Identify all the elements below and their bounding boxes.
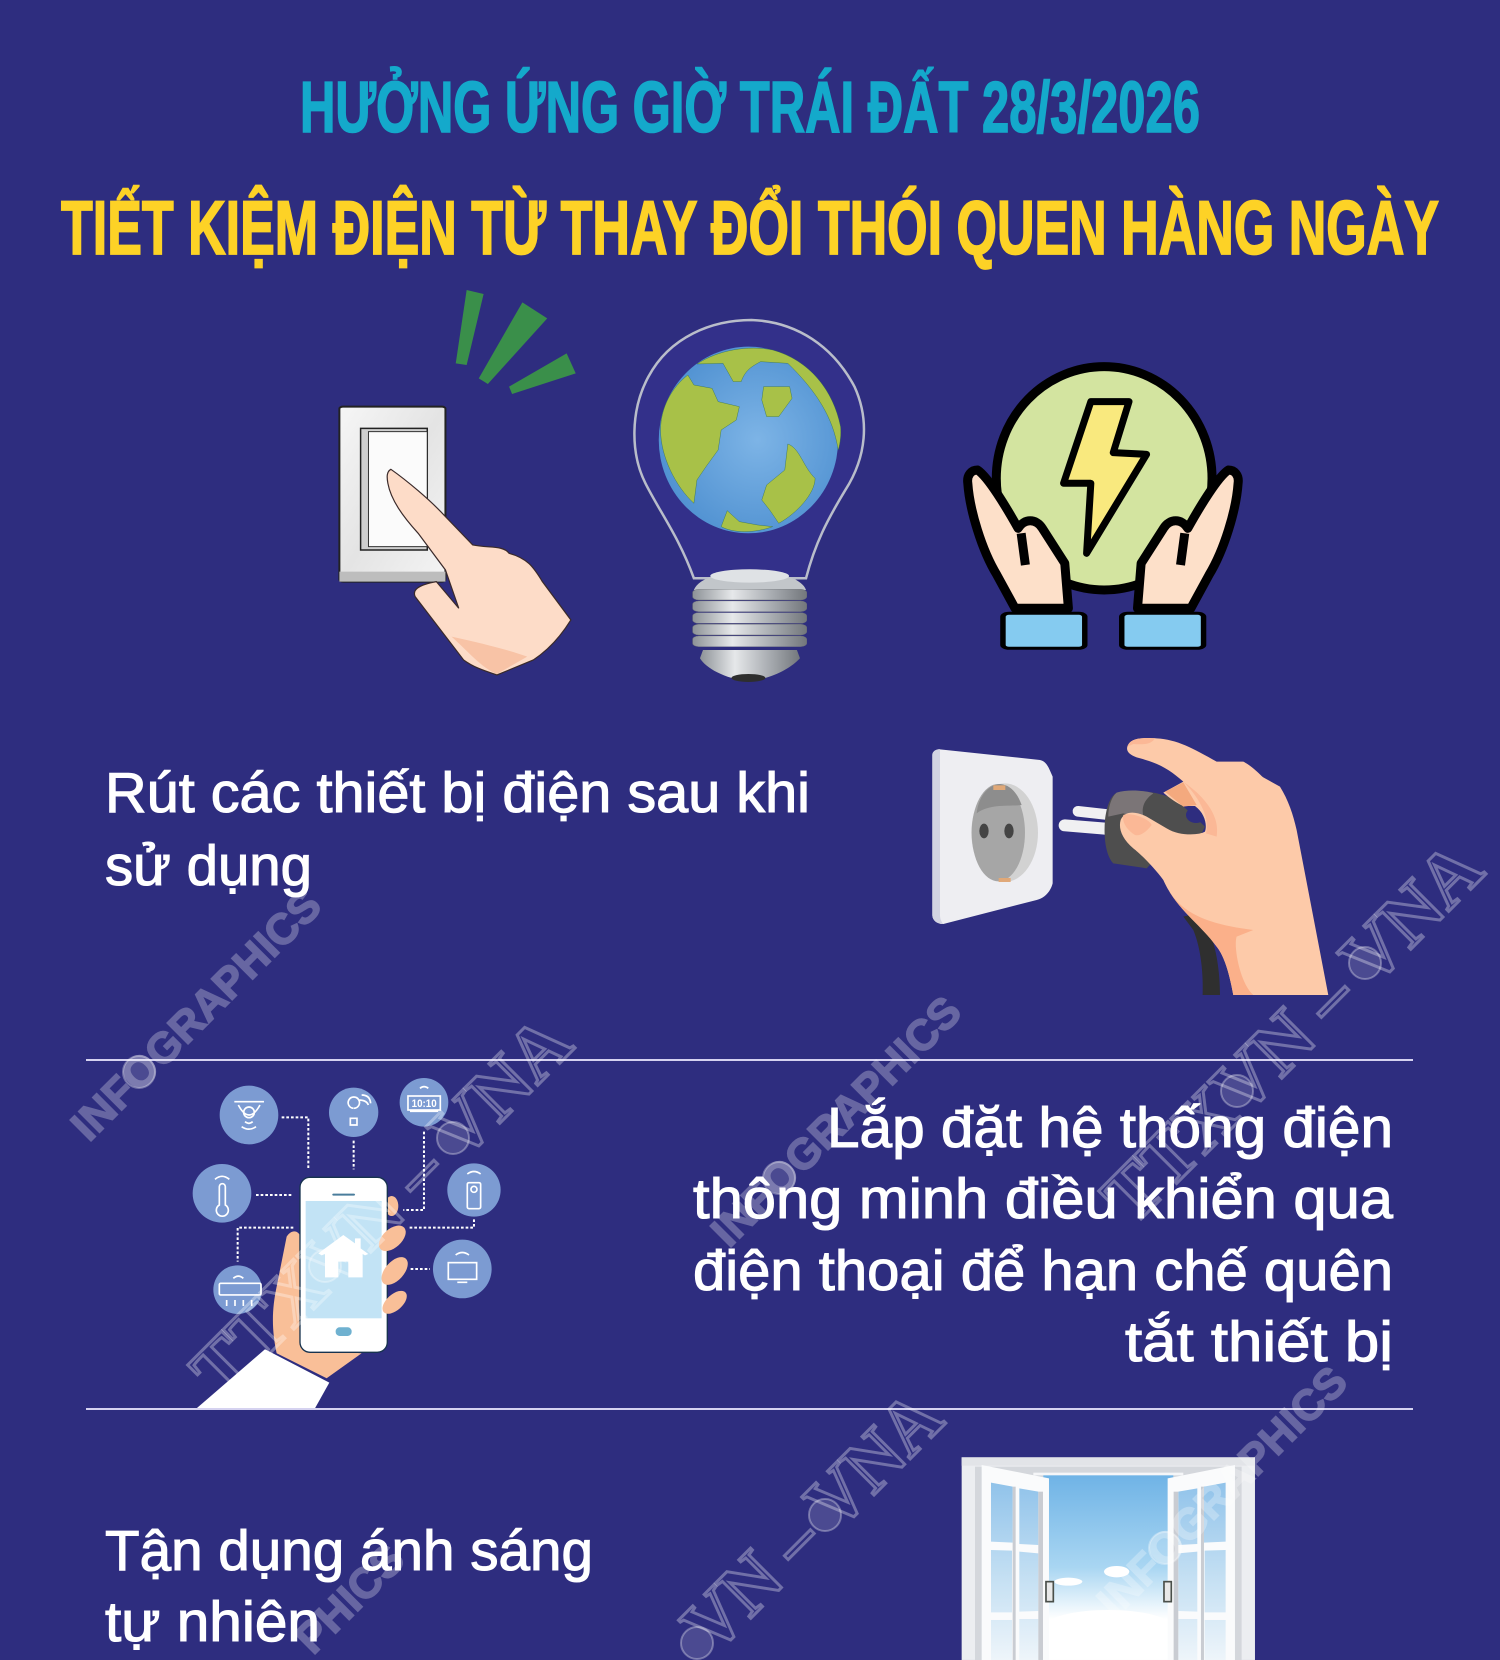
text: tip 2: tắt thiết bị	[1125, 1310, 1393, 1374]
text: tip 2: thông minh điều khiển qua	[693, 1167, 1393, 1231]
watermark: INFOGRAPHICS	[62, 881, 1357, 1660]
icon: lightning bolt	[1064, 402, 1147, 553]
icon: wall socket	[932, 749, 1053, 924]
icon: left hand	[968, 470, 1068, 608]
icon: hands holding energy	[968, 367, 1238, 648]
watermark: TTXVN – VNA	[175, 826, 1499, 1660]
watermark: INFOGRAPHICS: INFOGRAPHICS	[1088, 1357, 1357, 1626]
text: tip 3	[105, 1519, 593, 1654]
icon: smartphone	[300, 1177, 387, 1352]
icon: left window sash	[982, 1465, 1053, 1660]
text: tip 1: Rút các thiết bị điện sau khi	[105, 761, 810, 825]
icon: cuffs	[1003, 613, 1204, 648]
watermark: INFOGRAPHICS: INFOGRAPHICS	[702, 987, 971, 1256]
text: tip 3: Tận dụng ánh sáng	[105, 1519, 593, 1583]
icon: smartphone smart-home control	[193, 1078, 501, 1408]
icon: earth	[659, 347, 838, 533]
icon: continents	[661, 348, 841, 532]
icon: switch plate	[339, 407, 445, 582]
icon: device circles	[193, 1078, 501, 1314]
icon: dotted connection lines	[238, 1117, 474, 1269]
text: tip 2: Lắp đặt hệ thống điện	[827, 1096, 1393, 1160]
text: tip 2: điện thoại để hạn chế quên	[693, 1239, 1393, 1303]
icon: hand palm and back finger	[273, 1196, 398, 1378]
icon: finger pressing light switch	[339, 290, 576, 675]
icon: green click marks	[456, 290, 576, 394]
watermark: INFOGRAPHICS: PHICS	[286, 1535, 414, 1660]
icon: hand	[387, 469, 571, 675]
divider	[86, 1408, 1413, 1410]
text: tip 1: sử dụng	[105, 834, 312, 898]
text: tip 1	[105, 761, 810, 898]
watermark: TTXVN – VNA: TTXVN – VNA	[1086, 826, 1499, 1239]
icon: right hand	[1137, 470, 1238, 608]
divider	[86, 1059, 1413, 1061]
icon: light bulb with earth inside	[634, 320, 864, 682]
watermark: TTXVN – VNA: TTXVN – VNA	[175, 1000, 588, 1413]
icon: bulb glass	[634, 320, 864, 578]
icon: device glyphs	[215, 1087, 481, 1306]
watermark: INFOGRAPHICS: INFOGRAPHICS	[62, 881, 331, 1150]
icon: hand and cable	[1120, 738, 1328, 995]
icon: sky and clouds	[1033, 1473, 1183, 1660]
icon: right window sash	[1164, 1465, 1235, 1660]
text: tip 2	[693, 1096, 1393, 1374]
icon: energy globe	[996, 367, 1212, 590]
text: tip 3: tự nhiên	[105, 1590, 320, 1654]
watermark: TTXVN – VNA: VN – VNA	[666, 1375, 958, 1660]
icon: shirt sleeve	[197, 1349, 329, 1408]
icon: plug and pins	[1065, 791, 1206, 868]
icon: window frame	[962, 1457, 1255, 1660]
text: clock digits: 10:10	[412, 1098, 437, 1110]
icon: fingers over phone	[374, 1221, 413, 1318]
icon: open window with sky	[962, 1457, 1255, 1660]
icon: bulb screw base	[693, 569, 807, 682]
icon: hand unplugging from socket	[932, 738, 1328, 995]
